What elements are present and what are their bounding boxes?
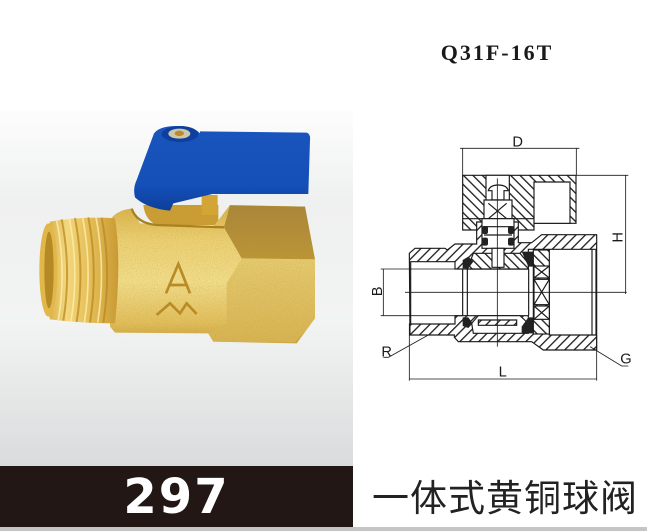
valve stem	[143, 195, 218, 225]
title: model number: Q31F-16T	[441, 40, 553, 65]
valve body section	[409, 222, 597, 350]
stem and gland	[482, 185, 514, 267]
product number: 297	[123, 469, 230, 525]
threaded male end	[39, 217, 118, 323]
dimension labels: H	[610, 232, 626, 243]
banner: product number bar	[0, 466, 353, 527]
technical cross-section drawing	[370, 135, 632, 381]
dimension labels: R	[381, 345, 392, 361]
valve body	[110, 205, 315, 343]
dimension labels: L	[499, 365, 507, 381]
seals	[463, 226, 533, 333]
handle section	[463, 175, 576, 230]
panel: photo background	[0, 110, 353, 466]
dimension labels: G	[620, 351, 632, 367]
bottom stripe	[0, 527, 647, 531]
dimension labels: D	[512, 135, 523, 151]
blue handle	[134, 126, 310, 211]
dimension labels: B	[370, 286, 386, 296]
product name: 一体式黄铜球阀	[372, 478, 638, 519]
logo mark A M	[157, 264, 197, 315]
illustration: brass ball valve photo	[39, 126, 315, 344]
insert nut	[463, 250, 549, 334]
dimension labels	[370, 135, 632, 381]
centre lines and dimension lines	[381, 148, 628, 381]
